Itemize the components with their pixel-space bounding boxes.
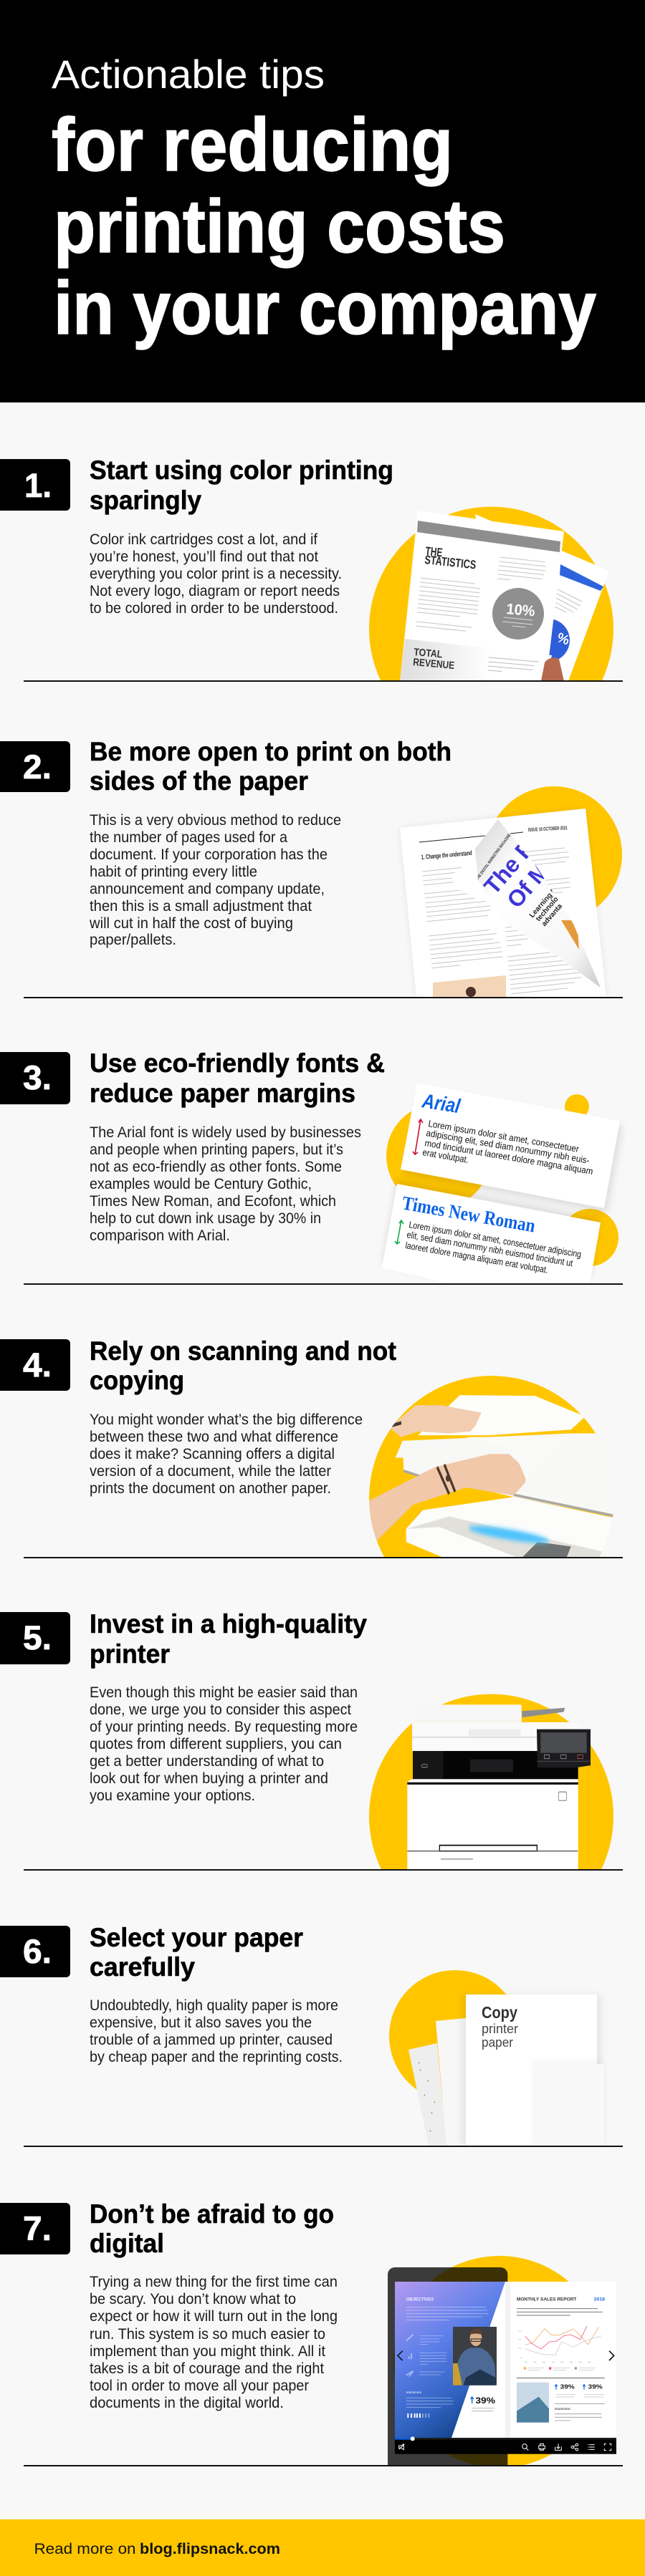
step 2 body text: document. If your corporation has the xyxy=(90,846,328,863)
step 5 body text: of your printing needs. By requesting more xyxy=(90,1719,358,1735)
step 3 body text: not as eco-friendly as other fonts. Some xyxy=(90,1159,342,1175)
step 2 number badge xyxy=(0,741,70,792)
step 3 illustration: font comparison cards xyxy=(382,1083,623,1283)
step 4 body text: between these two and what difference xyxy=(90,1429,338,1445)
step 1 number badge xyxy=(0,459,70,511)
title: bold lines: in your company xyxy=(54,266,596,350)
step 5 heading xyxy=(90,1609,367,1669)
step 6 body text: expensive, but it also saves you the xyxy=(90,2015,312,2031)
step 2 illustration: magazine page with curl: 1. Change the understand xyxy=(421,849,472,861)
step 3 number badge xyxy=(0,1052,70,1104)
step 3 body text: and people when printing papers, but it’s xyxy=(90,1142,343,1158)
step 7 illustration: digital flipbook on tablet: 39% xyxy=(560,2383,575,2390)
step 2 body text: This is a very obvious method to reduce xyxy=(90,812,341,829)
step 1 number badge: 1. xyxy=(24,466,52,504)
step 5 divider xyxy=(24,1869,623,1871)
step 7 number badge: 7. xyxy=(23,2209,52,2247)
step 1 illustration: report pages: STATISTICS xyxy=(424,553,477,572)
footer link text: Read more on xyxy=(34,2541,136,2557)
step 5 body text: get a better understanding of what to xyxy=(90,1753,324,1770)
step 2 body text xyxy=(89,812,341,948)
step 4 heading xyxy=(90,1336,396,1395)
step 7 body text: takes is a bit of courage and the right xyxy=(90,2360,324,2377)
step 1 divider xyxy=(24,680,623,682)
step 1 illustration: report pages: REVENUE xyxy=(413,657,455,672)
step 4 illustration: hands on scanner xyxy=(369,1376,614,1557)
step 4 body text xyxy=(90,1412,363,1497)
step 2 body text: habit of printing every little xyxy=(90,864,257,880)
step 1 heading: sparingly xyxy=(90,486,201,515)
step 2 heading xyxy=(90,737,452,796)
step 3 heading: reduce paper margins xyxy=(90,1079,355,1108)
step 1 body text: Color ink cartridges cost a lot, and if xyxy=(90,531,317,548)
step 6 illustration: paper samples: paper xyxy=(482,2035,513,2050)
step 3 illustration: font comparison cards: laoreet dolore magna aliquam erat volutpat. xyxy=(404,1240,549,1275)
title: bold lines: for reducing xyxy=(52,103,453,187)
step 6 heading: Select your paper xyxy=(90,1923,303,1952)
step 6 panel xyxy=(0,1923,623,2147)
step 3 illustration: font comparison cards: erat volutpat. xyxy=(421,1147,469,1165)
step 6 number badge xyxy=(0,1926,70,1977)
step 7 body text: implement than you might think. All it xyxy=(90,2343,325,2360)
step 3 illustration: font comparison cards: Lorem ipsum dolor sit amet, consectetuer adipiscing xyxy=(408,1219,582,1260)
step 2 illustration: magazine page with curl: advanta xyxy=(540,902,564,928)
step 5 body text: quotes from different suppliers, you can xyxy=(90,1736,342,1752)
step 3 panel xyxy=(0,1048,623,1285)
step 7 body text: documents in the digital world. xyxy=(90,2395,284,2411)
step 7 illustration: digital flipbook on tablet: STATISTICS xyxy=(406,2391,422,2394)
step 5 body text: look out for when buying a printer and xyxy=(90,1770,328,1787)
step 5 panel xyxy=(0,1612,623,1871)
step 1 illustration: report pages: THE xyxy=(425,544,443,559)
step 6 illustration: paper samples: Copy xyxy=(482,2003,517,2022)
step 2 body text: will cut in half the cost of buying xyxy=(89,915,293,932)
step 5 number badge: 5. xyxy=(23,1619,52,1656)
step 2 body text: the number of pages used for a xyxy=(90,829,287,846)
step 7 illustration: digital flipbook on tablet: OBJECTIVES xyxy=(406,2297,434,2302)
step 1 heading xyxy=(90,455,393,515)
step 6 illustration: paper samples: printer xyxy=(482,2022,518,2036)
step 2 illustration: magazine page with curl: THE DIGITAL MARKETING MAGAZINE xyxy=(476,834,512,881)
step 3 illustration: font comparison cards: Arial xyxy=(420,1089,462,1117)
step 6 number badge: 6. xyxy=(23,1932,52,1970)
step 5 body text: Even though this might be easier said than xyxy=(90,1684,358,1701)
step 2 heading: sides of the paper xyxy=(90,766,308,796)
step 5 number badge xyxy=(0,1612,70,1664)
step 4 body text: version of a document, while the latter xyxy=(90,1463,331,1480)
step 1 body text: you’re honest, you’ll find out that not xyxy=(90,549,318,565)
step 7 illustration: digital flipbook on tablet: 39% xyxy=(588,2383,603,2390)
step 3 body text: comparison with Arial. xyxy=(90,1227,230,1244)
step 2 illustration: magazine page with curl: ISSUE 18 OCTOBER 2021 xyxy=(528,826,568,833)
step 6 divider xyxy=(24,2146,623,2147)
step 7 divider xyxy=(24,2465,623,2466)
step 7 illustration: digital flipbook on tablet: MONTHLY SALES REPORT xyxy=(517,2297,576,2302)
step 2 panel xyxy=(0,737,623,998)
step 2 illustration: magazine page with curl: Of M xyxy=(502,857,555,913)
step 4 number badge xyxy=(0,1339,70,1391)
step 2 illustration: magazine page with curl: The Fr xyxy=(479,829,544,899)
step 7 heading: digital xyxy=(90,2229,164,2258)
footer banner xyxy=(0,2519,645,2576)
step 6 body text: by cheap paper and the reprinting costs. xyxy=(90,2049,343,2065)
step 3 body text: The Arial font is widely used by businesses xyxy=(90,1124,361,1141)
step 3 illustration: font comparison cards: mod tincidunt ut laoreet dolore magna aliquam xyxy=(424,1137,594,1177)
footer link text: blog.flipsnack.com xyxy=(140,2541,280,2557)
step 3 illustration: font comparison cards: adipiscing elit, sed diam nonummy nibh euis- xyxy=(425,1127,591,1166)
step 2 body text: announcement and company update, xyxy=(90,881,325,897)
title: light line: Actionable tips xyxy=(52,52,325,97)
footer link text xyxy=(34,2541,280,2557)
step 2 divider xyxy=(24,997,623,998)
step 1 illustration: report pages: 10% xyxy=(506,601,536,619)
step 5 heading: printer xyxy=(90,1639,170,1669)
step 6 heading: carefully xyxy=(90,1952,195,1982)
step 3 illustration: font comparison cards: Lorem ipsum dolor sit amet, consectetuer xyxy=(427,1118,580,1154)
step 4 number badge: 4. xyxy=(23,1346,52,1384)
step 4 divider xyxy=(24,1557,623,1558)
step 4 body text: You might wonder what’s the big difference xyxy=(90,1412,363,1428)
header banner xyxy=(0,0,645,402)
step 3 body text: examples would be Century Gothic, xyxy=(90,1176,312,1192)
step 3 heading xyxy=(90,1048,385,1108)
step 3 illustration: font comparison cards: Times New Roman xyxy=(401,1192,537,1237)
step 5 illustration: printer xyxy=(369,1694,613,1869)
step 1 illustration: report pages xyxy=(369,507,613,680)
step 7 number badge xyxy=(0,2203,70,2254)
step 6 body text: trouble of a jammed up printer, caused xyxy=(90,2032,333,2048)
step 2 number badge: 2. xyxy=(23,748,52,786)
step 3 heading: Use eco-friendly fonts & xyxy=(90,1048,385,1078)
step 4 body text: prints the document on another paper. xyxy=(90,1480,331,1497)
title: bold lines xyxy=(52,103,596,350)
step 1 heading: Start using color printing xyxy=(90,455,393,485)
step 6 body text: Undoubtedly, high quality paper is more xyxy=(90,1997,338,2014)
step 6 body text xyxy=(90,1997,343,2065)
step 6 heading xyxy=(90,1923,303,1982)
step 7 illustration: digital flipbook on tablet: 39% xyxy=(475,2396,495,2406)
step 2 illustration: magazine page with curl: technolo xyxy=(535,895,560,923)
step 3 divider xyxy=(24,1283,623,1285)
title: bold lines: printing costs xyxy=(54,185,505,269)
step 1 body text xyxy=(90,531,342,617)
step 4 heading: Rely on scanning and not xyxy=(90,1336,396,1366)
step 5 body text: you examine your options. xyxy=(90,1788,255,1804)
step 7 body text: tool in order to move all your paper xyxy=(90,2378,309,2394)
step 7 heading: Don’t be afraid to go xyxy=(90,2199,334,2229)
step 7 heading xyxy=(90,2199,334,2258)
step 5 body text xyxy=(90,1684,358,1804)
step 3 illustration: font comparison cards: elit, sed diam nonummy nibh euismod tincidunt ut xyxy=(406,1229,574,1268)
step 6 illustration: paper samples xyxy=(389,1970,604,2146)
step 2 body text: paper/pallets. xyxy=(90,932,176,948)
step 7 body text xyxy=(90,2274,338,2411)
step 1 body text: everything you color print is a necessity. xyxy=(90,566,342,582)
step 7 illustration: digital flipbook on tablet: 2018 xyxy=(594,2298,606,2302)
step 4 heading: copying xyxy=(90,1366,184,1395)
step 5 body text: done, we urge you to consider this aspect xyxy=(90,1702,351,1718)
step 1 illustration: report pages: TOTAL xyxy=(414,647,443,660)
step 7 body text: Trying a new thing for the first time can xyxy=(90,2274,338,2290)
step 7 illustration: digital flipbook on tablet: STATISTICS xyxy=(555,2408,570,2411)
step 1 panel xyxy=(0,459,623,682)
step 7 illustration: digital flipbook on tablet xyxy=(388,2256,616,2469)
step 7 body text: expect or how it will turn out in the long xyxy=(90,2308,338,2325)
step 1 illustration: report pages: % xyxy=(555,630,571,649)
step 1 body text: to be colored in order to be understood. xyxy=(90,600,338,617)
step 2 illustration: magazine page with curl xyxy=(400,786,622,998)
step 2 heading: Be more open to print on both xyxy=(90,737,452,766)
step 3 body text: help to cut down ink usage by 30% in xyxy=(90,1210,321,1227)
step 1 body text: Not every logo, diagram or report needs xyxy=(90,583,340,599)
step 4 panel xyxy=(0,1339,623,1558)
step 5 heading: Invest in a high-quality xyxy=(90,1609,367,1639)
step 2 body text: then this is a small adjustment that xyxy=(90,898,312,915)
step 3 number badge: 3. xyxy=(23,1058,52,1096)
step 7 body text: be scary. You don’t know what to xyxy=(90,2291,296,2307)
step 3 body text xyxy=(90,1124,361,1244)
step 2 illustration: magazine page with curl: Learning f xyxy=(528,888,557,920)
step 7 body text: run. This system is so much easier to xyxy=(90,2326,325,2343)
step 7 panel xyxy=(0,2199,623,2469)
step 4 body text: does it make? Scanning offers a digital xyxy=(90,1446,335,1462)
step 3 body text: Times New Roman, and Ecofont, which xyxy=(90,1193,336,1210)
